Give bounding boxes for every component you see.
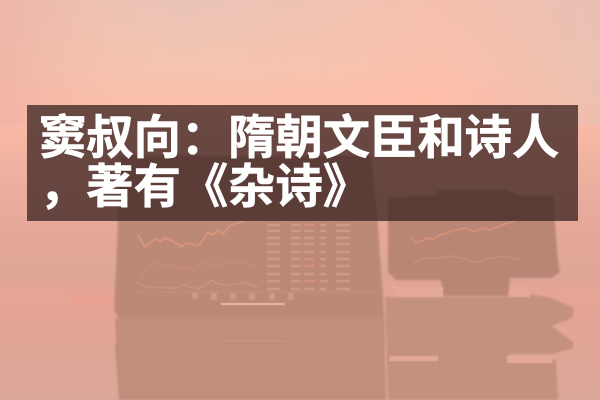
tablet monitor silhouette bbox=[385, 190, 574, 400]
title banner bbox=[27, 105, 578, 221]
left chart lines bbox=[135, 218, 380, 341]
water streak bbox=[70, 296, 112, 303]
gap highlights beside tablet stand bbox=[388, 282, 552, 363]
laptop monitor silhouette bbox=[114, 156, 386, 400]
title bbox=[39, 112, 559, 214]
title: ，著有《杂诗》 bbox=[39, 160, 370, 214]
right chart lines bbox=[411, 219, 520, 263]
nav underline bbox=[221, 303, 285, 305]
title: 窦叔向：隋朝文臣和诗人 bbox=[39, 112, 559, 165]
nav icons bbox=[192, 293, 294, 300]
left data table bbox=[267, 224, 350, 290]
